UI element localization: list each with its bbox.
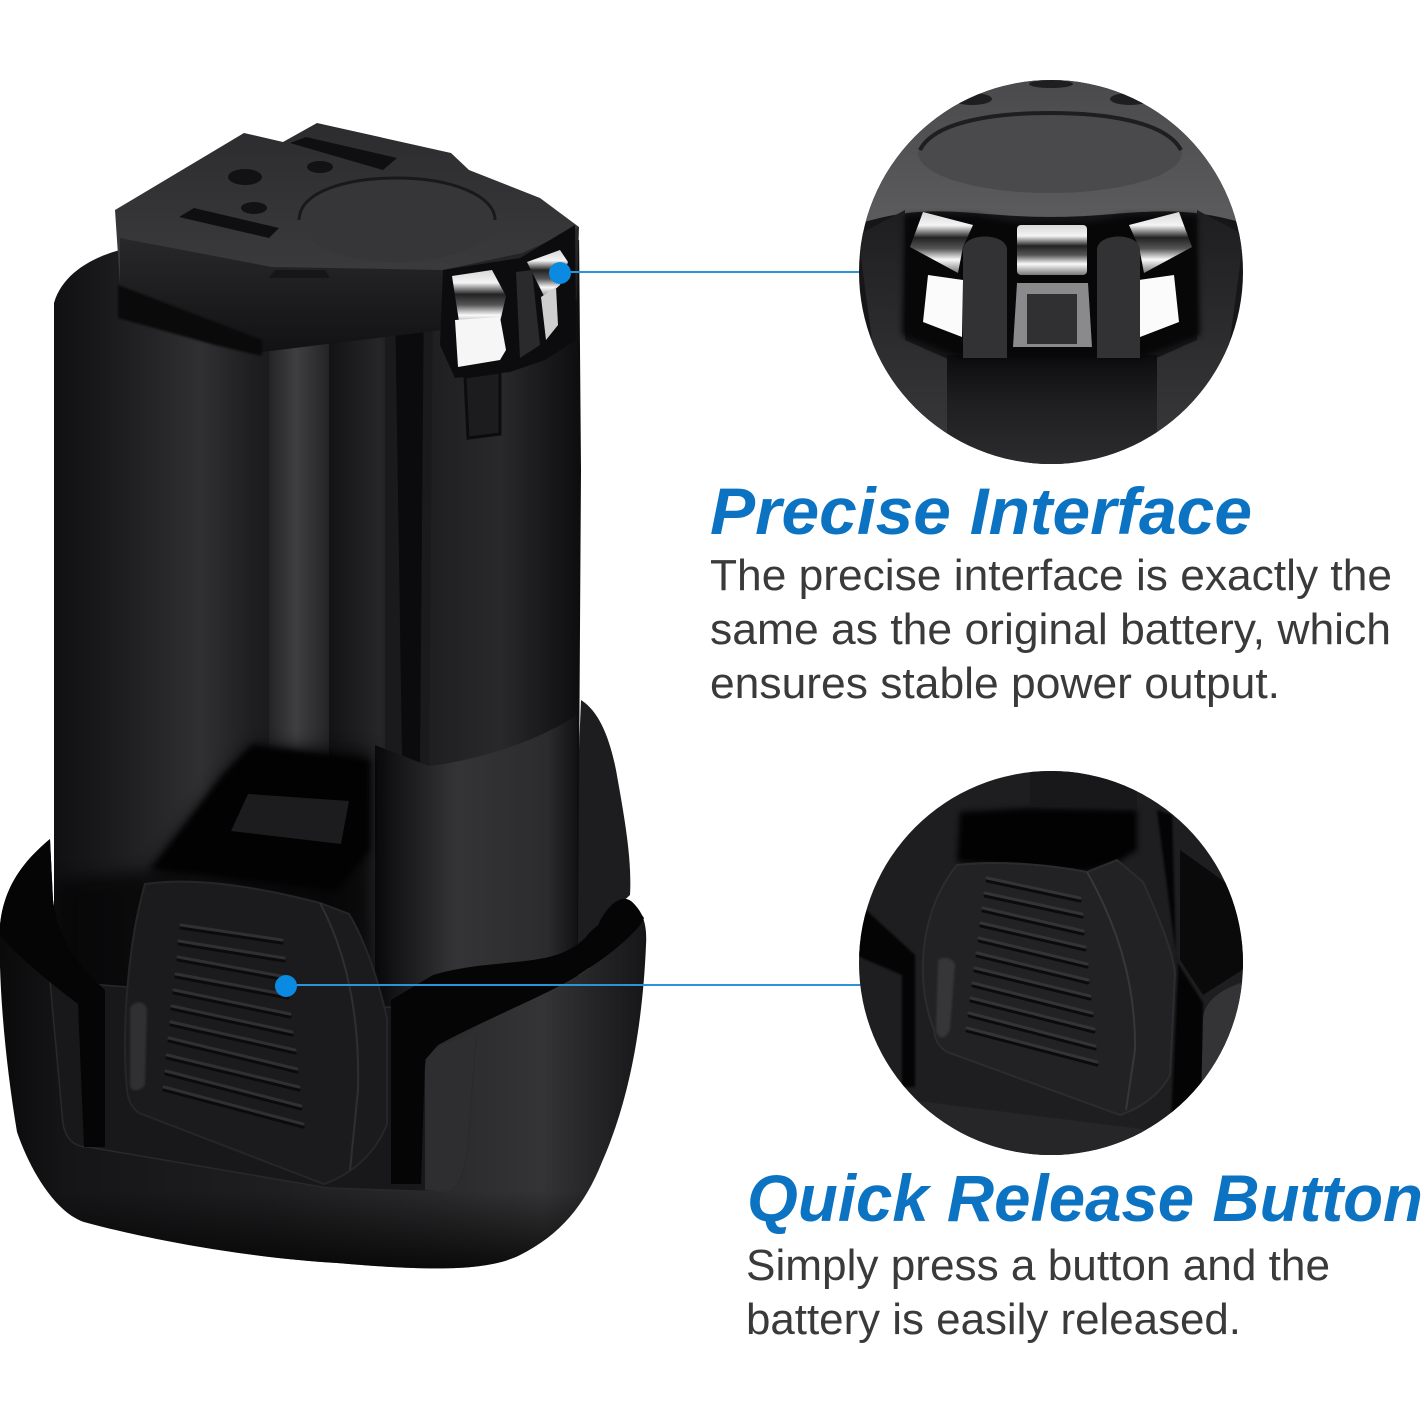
center contact upper [1017,225,1087,275]
callout line: interface [549,262,862,284]
heading: Precise Interface: Precise Interface [710,474,1252,548]
right lighter panel [1202,982,1242,1082]
text block: Precise Interface description: same as the original battery, which [710,605,1391,654]
lower shadow [59,740,375,986]
text block: Precise Interface description: The precise interface is exactly the [710,551,1392,600]
lower band [947,355,1157,470]
left contact lower [923,275,963,337]
left black shading [855,900,915,1087]
base rear wing [570,700,630,970]
center contact lower [1013,283,1092,347]
contact frame [440,225,576,378]
upper shadow [957,808,1137,872]
right black rim [391,899,644,1184]
lower body section [375,722,568,1006]
right black shading [1157,810,1203,1140]
detail button [923,860,1175,1115]
text block: Quick Release Button description [746,1241,1330,1344]
latch tab [231,794,349,844]
base front panel [50,981,476,1192]
right contact lower [1139,275,1179,337]
connector holes [228,161,333,214]
side panels [860,210,950,436]
lower band [917,1100,1146,1155]
dark posts [963,236,1007,358]
contact recess [902,215,1200,358]
battery product image [0,123,646,1268]
base bottom shade [17,1132,602,1268]
left contact upper [910,212,973,273]
text block: Quick Release Button description: Simply press a button and the [746,1241,1330,1290]
left black rim [0,839,105,1147]
large disc [918,145,1182,193]
rib cap [269,270,330,278]
base right lighter panel [425,1034,476,1192]
left metal contact [452,270,506,438]
text block: Quick Release Button description: battery is easily released. [746,1295,1241,1344]
detail grip ridges [967,878,1097,1065]
heading: Quick Release Button: Quick Release Button [747,1161,1423,1235]
latch tab [1030,771,1137,792]
button grip ridges [164,925,303,1127]
shadow above button [151,745,370,891]
body vertical rib [269,344,329,752]
right metal contact [516,250,568,358]
text block: Precise Interface description: ensures stable power output. [710,659,1280,708]
connector slots [179,208,279,238]
callout line: button [275,975,862,997]
top connector collar [115,123,579,356]
text block: Precise Interface description [710,551,1392,708]
detail circle: contacts [855,75,1250,470]
body dark side channel [385,275,433,779]
battery body [54,240,581,1007]
detail circle: button [855,765,1250,1160]
right contact upper [1129,212,1192,273]
base shell [0,839,646,1268]
release button [125,882,387,1184]
right upper panel [1180,850,1250,995]
round disc [299,178,495,262]
